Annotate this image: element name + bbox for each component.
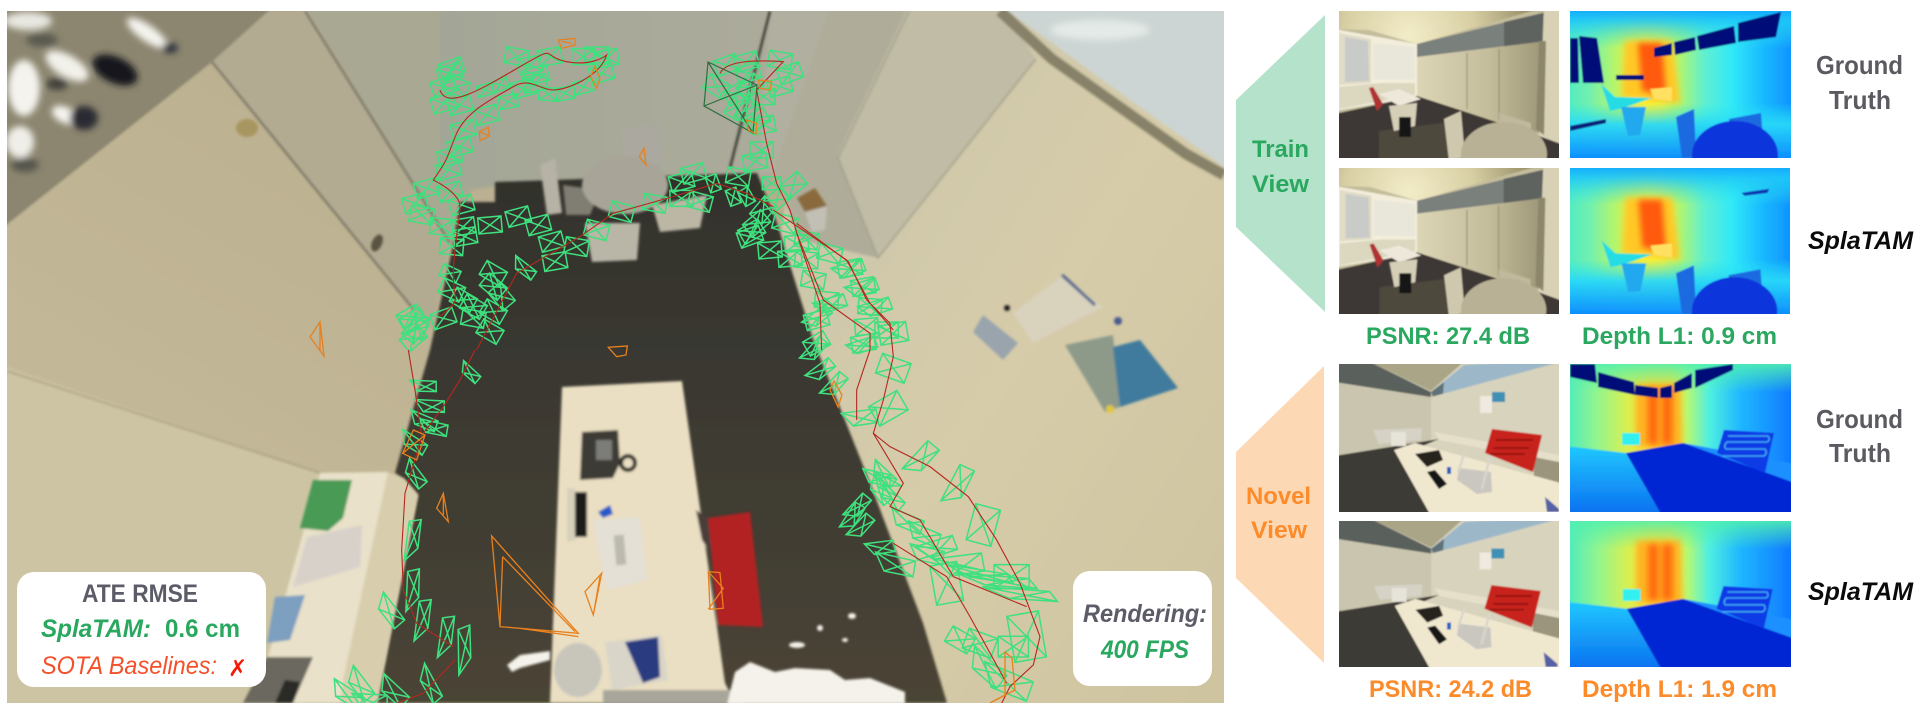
ground truth RGB	[1339, 11, 1559, 158]
cabinet with objects	[243, 472, 418, 703]
green camera frustums: right side of room	[795, 259, 1059, 710]
mottled ceiling top-left	[4, 12, 1150, 172]
SplaTAM depth	[1570, 168, 1790, 314]
novel view label line 2: View	[1251, 517, 1307, 544]
SplaTAM RGB	[1339, 168, 1559, 314]
floor	[377, 173, 947, 703]
SplaTAM RGB	[1339, 521, 1559, 667]
ground truth label: Ground	[1816, 50, 1903, 80]
PSNR metric: PSNR: 27.4 dB	[1366, 323, 1530, 350]
panel: train view	[1236, 1, 1914, 350]
ground truth label line 2: Truth	[1829, 438, 1891, 468]
novel view label: Novel	[1246, 483, 1311, 510]
posters on right wall	[973, 275, 1178, 413]
door handles	[236, 119, 385, 253]
SplaTAM row label: SplaTAM	[1808, 227, 1914, 255]
baselines label: SOTA Baselines:	[41, 652, 217, 680]
office desk with items	[550, 381, 763, 704]
dark green highlighted frustum	[704, 62, 757, 133]
train view banner	[1236, 15, 1325, 312]
room background: walls and ceiling	[0, 0, 1240, 710]
cardboard box	[797, 188, 827, 232]
panel: 3D reconstruction with camera trajectory	[0, 0, 1240, 710]
PSNR metric: PSNR: 24.2 dB	[1369, 676, 1532, 703]
green camera frustums: lower left of room	[326, 357, 482, 710]
SplaTAM error: SplaTAM:	[41, 615, 151, 643]
white holes on the floor	[507, 613, 905, 704]
ground truth label line 2: Truth	[1829, 85, 1891, 115]
SplaTAM error value: 0.6 cm	[165, 615, 240, 643]
depth metric: Depth L1: 1.9 cm	[1582, 676, 1777, 703]
red ground-truth trajectory	[397, 53, 1040, 703]
novel view banner	[1236, 366, 1324, 663]
round table and chairs	[540, 159, 708, 264]
callout heading: ATE RMSE	[82, 580, 198, 608]
SplaTAM row label: SplaTAM	[1808, 578, 1914, 606]
FPS value: 400 FPS	[1100, 636, 1189, 664]
callout: ATE RMSE	[17, 572, 266, 687]
train view label: Train	[1252, 136, 1309, 163]
red cross: ✗	[228, 656, 247, 682]
rendering label: Rendering:	[1083, 600, 1207, 628]
train view label line 2: View	[1252, 171, 1309, 198]
green camera frustums: top and back of room	[396, 47, 898, 356]
ground truth depth	[1570, 364, 1791, 512]
ground truth RGB	[1339, 364, 1559, 512]
ground truth label: Ground	[1816, 404, 1903, 434]
SplaTAM depth	[1570, 521, 1791, 667]
ground truth depth	[1570, 11, 1791, 158]
depth metric: Depth L1: 0.9 cm	[1582, 323, 1777, 350]
panel: novel view	[1236, 354, 1914, 703]
callout: rendering speed	[1073, 571, 1212, 686]
orange baseline camera frustums	[310, 38, 1015, 703]
